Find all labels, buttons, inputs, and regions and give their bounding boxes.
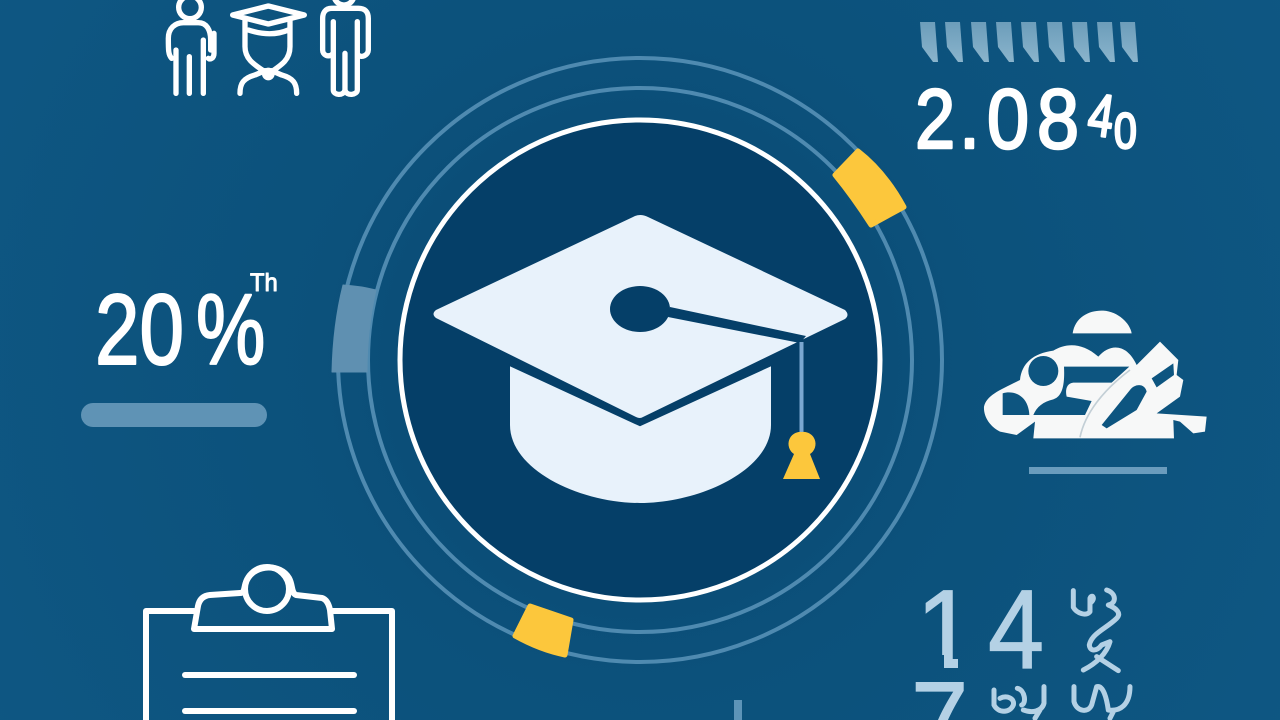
value: 4: [1084, 81, 1118, 151]
scribbled characters: [994, 590, 1130, 718]
value: 0: [1114, 103, 1137, 159]
numerals: 4: [988, 567, 1044, 692]
graduate centre: [233, 6, 304, 93]
left bar: [81, 403, 267, 427]
value: 0: [987, 72, 1029, 166]
grey-blue marker left: [332, 285, 376, 372]
icon: people and graduate: [168, 0, 368, 94]
value 20 percent: 20: [95, 275, 184, 386]
icon: graduation cap: [434, 215, 848, 503]
tick row: [920, 22, 1138, 62]
cap base: [510, 363, 771, 503]
stat: bottom right: [916, 588, 1132, 720]
cap board: [434, 215, 848, 418]
tassel: [783, 432, 820, 479]
button and strap: [668, 307, 806, 343]
numerals: [916, 590, 1042, 720]
tassel cord: [800, 342, 804, 435]
value: 2: [915, 72, 955, 166]
value: [915, 72, 1137, 166]
cap board shadow: [510, 363, 771, 423]
value 20 percent: [95, 269, 278, 386]
icon: abstract books and pen: [984, 311, 1207, 474]
icon: clipboard: [146, 567, 392, 720]
caption bar: [1029, 467, 1167, 474]
value: 8: [1037, 72, 1079, 166]
person right: [323, 0, 368, 94]
value 20 percent: %: [196, 275, 265, 386]
numerals: 1: [916, 568, 975, 693]
stat: left: [81, 269, 278, 427]
yellow marker bottom: [515, 606, 571, 655]
stat: top right: [915, 22, 1138, 166]
central badge with orbit rings: [332, 58, 942, 662]
value: .: [959, 72, 980, 166]
person left: [168, 0, 214, 93]
value 20 percent: Th: [250, 269, 278, 297]
yellow marker top right: [835, 151, 904, 225]
bottom tick mark: [734, 700, 742, 720]
